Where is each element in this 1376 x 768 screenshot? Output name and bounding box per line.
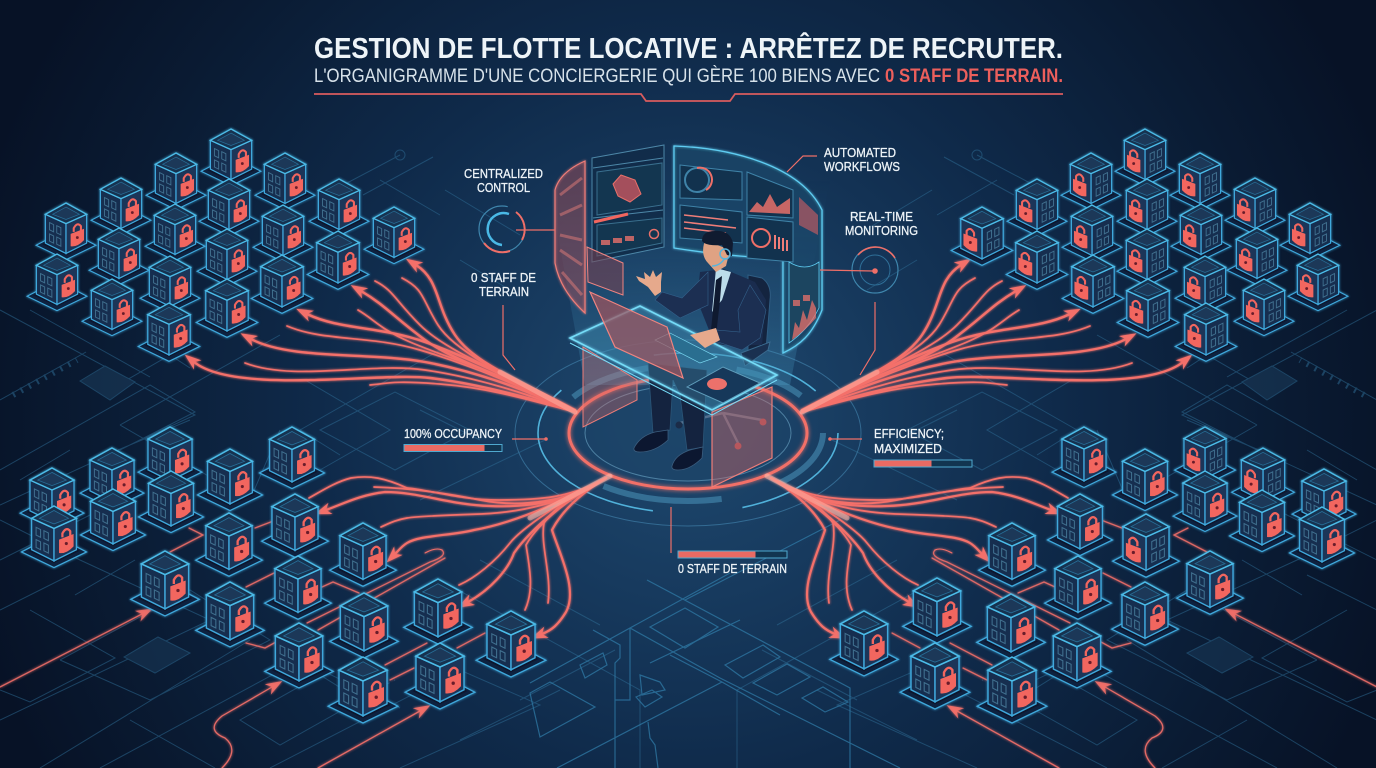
buildings: top-left cluster — [27, 129, 424, 361]
top-left fan — [194, 265, 575, 412]
headset — [712, 249, 730, 266]
desk: top slab — [570, 306, 777, 410]
hair — [702, 231, 733, 256]
chair — [676, 275, 770, 450]
typing arm — [712, 285, 766, 350]
icon: monitoring gauge — [820, 247, 898, 375]
callout: real-time monitoring: REAL-TIME — [850, 209, 913, 224]
holographic screens — [555, 145, 822, 353]
icon: control gauge — [479, 206, 555, 252]
buildings: bottom-left cluster — [20, 427, 546, 723]
callout: zero field staff: 0 STAFF DE — [471, 270, 536, 285]
desk: keyboard — [655, 333, 717, 363]
raised hand — [636, 270, 662, 296]
callout: real-time monitoring: MONITORING — [845, 223, 918, 238]
stat: occupancy — [404, 426, 548, 452]
desk: laptop screen — [590, 292, 683, 378]
torso — [697, 269, 766, 345]
callout: centralized control: CONTROL — [477, 180, 530, 195]
buildings: top-right cluster — [951, 129, 1348, 361]
circuit board background: left side — [0, 150, 640, 768]
title rule — [314, 94, 1063, 101]
stat: zero staff bar — [671, 507, 787, 576]
callout: centralized control: CENTRALIZED — [464, 166, 543, 181]
shoes — [634, 430, 703, 470]
callout: zero field staff: TERRAIN — [479, 284, 529, 299]
manager figure — [634, 231, 766, 470]
callout: centralized control — [464, 166, 555, 252]
stat: efficiency: EFFICIENCY; — [874, 426, 944, 441]
desk — [570, 292, 777, 487]
outer arrows — [0, 520, 485, 768]
stat: efficiency — [828, 426, 972, 467]
light cone above hub — [548, 180, 830, 385]
subtitle: L'ORGANIGRAMME D'UNE CONCIERGERIE QUI GÈRE 100 BIENS AVEC — [314, 64, 880, 87]
hub rings — [515, 340, 861, 526]
head — [703, 240, 730, 272]
legs — [648, 363, 707, 450]
callout: real-time monitoring — [820, 209, 918, 375]
callout: automated workflows: AUTOMATED — [824, 145, 896, 160]
screen: main right curved panel — [674, 146, 822, 353]
typing hand — [690, 328, 720, 348]
stat: zero staff bar: 0 STAFF DE TERRAIN — [678, 561, 787, 576]
desk: right leg panel — [712, 387, 772, 487]
shirt and tie — [712, 268, 731, 312]
bottom-left fan — [309, 476, 610, 634]
circuit board background: right side — [737, 150, 1376, 768]
desk: control pad — [687, 367, 760, 403]
subtitle: 0 STAFF DE TERRAIN. — [885, 65, 1063, 87]
screen: left curved panel — [555, 161, 585, 313]
flow lines: right bundles with arrows — [767, 265, 1376, 768]
desk: left leg panel — [583, 347, 637, 427]
stat: efficiency: MAXIMIZED — [874, 441, 942, 456]
screen: middle panel — [592, 145, 664, 262]
callout: automated workflows: WORKFLOWS — [824, 159, 900, 174]
flow lines: left bundles with arrows — [0, 265, 610, 768]
callout: zero field staff — [471, 270, 536, 370]
circuit board background: bottom center — [530, 520, 900, 768]
badge — [746, 296, 758, 308]
raised arm — [655, 272, 708, 318]
title block — [314, 31, 1063, 101]
title: GESTION DE FLOTTE LOCATIVE : ARRÊTEZ DE RECRUTER. — [314, 31, 1063, 65]
screen: small floating panel — [587, 247, 623, 295]
buildings: bottom-right cluster — [830, 427, 1356, 723]
stat: occupancy: 100% OCCUPANCY — [404, 426, 502, 441]
callout: automated workflows — [787, 145, 900, 174]
